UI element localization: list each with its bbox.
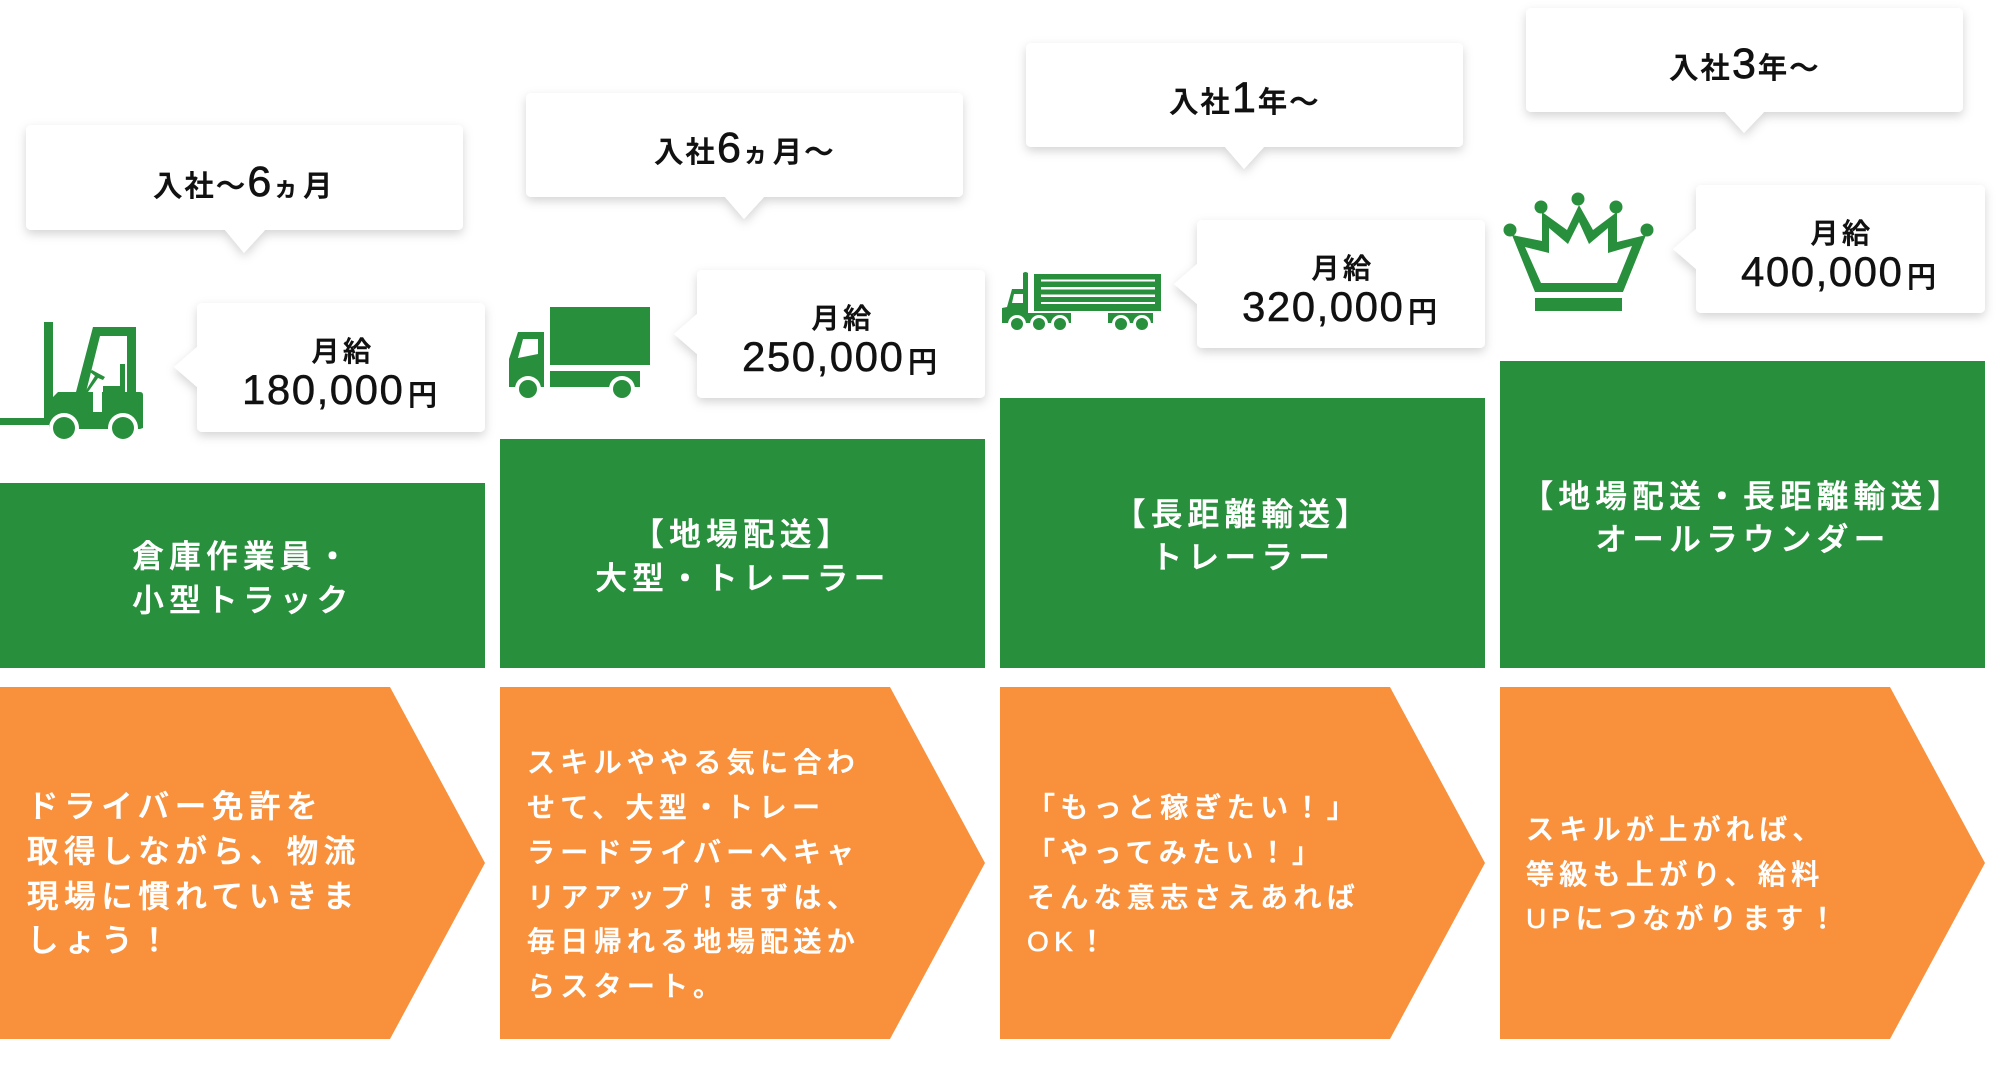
description arrow: しょう！ [27, 922, 175, 958]
job title: 倉庫作業員・小型トラック [0, 483, 485, 668]
description arrow: 等級も上がり、給料 [1526, 859, 1825, 890]
salary bubble: 180,000円: 月給 [311, 336, 375, 367]
description arrow: 毎日帰れる地場配送か [527, 926, 860, 957]
salary bubble: 320,000円: 円 [1408, 297, 1437, 329]
description arrow: らスタート。 [527, 971, 726, 1002]
job title: 長距離輸送 トレーラー: 【長距離輸送】 [1114, 496, 1372, 532]
period bubble: 入社3年〜: 入社3年〜 [1669, 40, 1821, 88]
job title: 地場配送・長距離輸送 オールラウンダー: 【地場配送・長距離輸送】 [1522, 478, 1964, 514]
job title: 倉庫作業員・小型トラック: 倉庫作業員・ [132, 538, 354, 574]
description arrow: 「もっと稼ぎたい！」 [1027, 792, 1360, 823]
salary bubble: 250,000円: 250,000 [742, 333, 904, 380]
description arrow: OK！ [1027, 926, 1111, 957]
salary bubble: 320,000円: 320,000 [1242, 283, 1404, 330]
job title: 長距離輸送 トレーラー: トレーラー [1151, 539, 1335, 575]
salary bubble: 250,000円: 月給 [811, 303, 875, 334]
icon: forklift [0, 322, 143, 443]
description arrow [1500, 687, 1985, 1039]
description arrow: せて、大型・トレー [527, 792, 825, 823]
salary bubble: 400,000円 [1673, 185, 1985, 313]
panel: column 4 crown stage [1500, 8, 1985, 1039]
description arrow: リアアップ！まずは、 [527, 882, 860, 913]
description arrow [500, 687, 985, 1039]
period bubble: 入社1年〜 [1026, 43, 1463, 169]
period bubble: 入社1年〜: 入社1年〜 [1169, 74, 1321, 122]
period bubble: 入社6ヵ月〜 [526, 93, 963, 219]
job title: 地場配送・長距離輸送 オールラウンダー: オールラウンダー [1595, 521, 1891, 557]
salary bubble: 320,000円: 月給 [1311, 253, 1375, 284]
salary bubble: 250,000円: 円 [908, 347, 937, 379]
description arrow: ドライバー免許を [27, 788, 323, 824]
icon: trailer truck [1002, 272, 1161, 333]
description arrow: 「やってみたい！」 [1027, 837, 1325, 868]
description arrow: スキルが上がれば、 [1526, 814, 1826, 845]
salary bubble: 320,000円 [1174, 220, 1485, 348]
description arrow: 取得しながら、物流 [27, 833, 361, 869]
job title: 地場配送 大型・トレーラー: 【地場配送】 [632, 516, 854, 552]
salary bubble: 180,000円: 円 [408, 380, 437, 412]
panel: column 1 forklift stage [0, 125, 485, 1039]
description arrow: ラードライバーへキャ [527, 837, 859, 868]
icon: crown [1504, 192, 1654, 311]
job title: 地場配送 大型・トレーラー [500, 439, 985, 668]
job title: 倉庫作業員・小型トラック: 小型トラック [132, 582, 354, 618]
icon: truck [509, 307, 650, 402]
salary bubble: 250,000円 [674, 270, 985, 398]
period bubble: 入社3年〜 [1526, 8, 1963, 133]
salary bubble: 180,000円: 180,000 [242, 366, 404, 413]
job title: 地場配送・長距離輸送 オールラウンダー [1500, 361, 1985, 668]
panel: column 3 trailer stage [1000, 43, 1485, 1039]
panel: column 2 truck stage [500, 93, 985, 1039]
period bubble: 入社〜6ヵ月 [26, 125, 463, 253]
job title: 長距離輸送 トレーラー [1000, 398, 1485, 668]
salary bubble: 180,000円 [174, 303, 485, 432]
salary bubble: 400,000円: 月給 [1810, 218, 1874, 249]
job title: 地場配送 大型・トレーラー: 大型・トレーラー [595, 560, 891, 596]
description arrow: そんな意志さえあれば [1027, 882, 1360, 913]
period bubble: 入社〜6ヵ月: 入社〜6ヵ月 [153, 158, 335, 206]
salary bubble: 400,000円: 400,000 [1741, 248, 1903, 295]
description arrow [0, 687, 485, 1039]
description arrow [1000, 687, 1485, 1039]
description arrow: 現場に慣れていきま [27, 878, 360, 914]
salary bubble: 400,000円: 円 [1907, 262, 1936, 294]
description arrow: スキルややる気に合わ [527, 747, 860, 778]
description arrow: UPにつながります！ [1526, 903, 1842, 934]
period bubble: 入社6ヵ月〜: 入社6ヵ月〜 [654, 124, 836, 172]
